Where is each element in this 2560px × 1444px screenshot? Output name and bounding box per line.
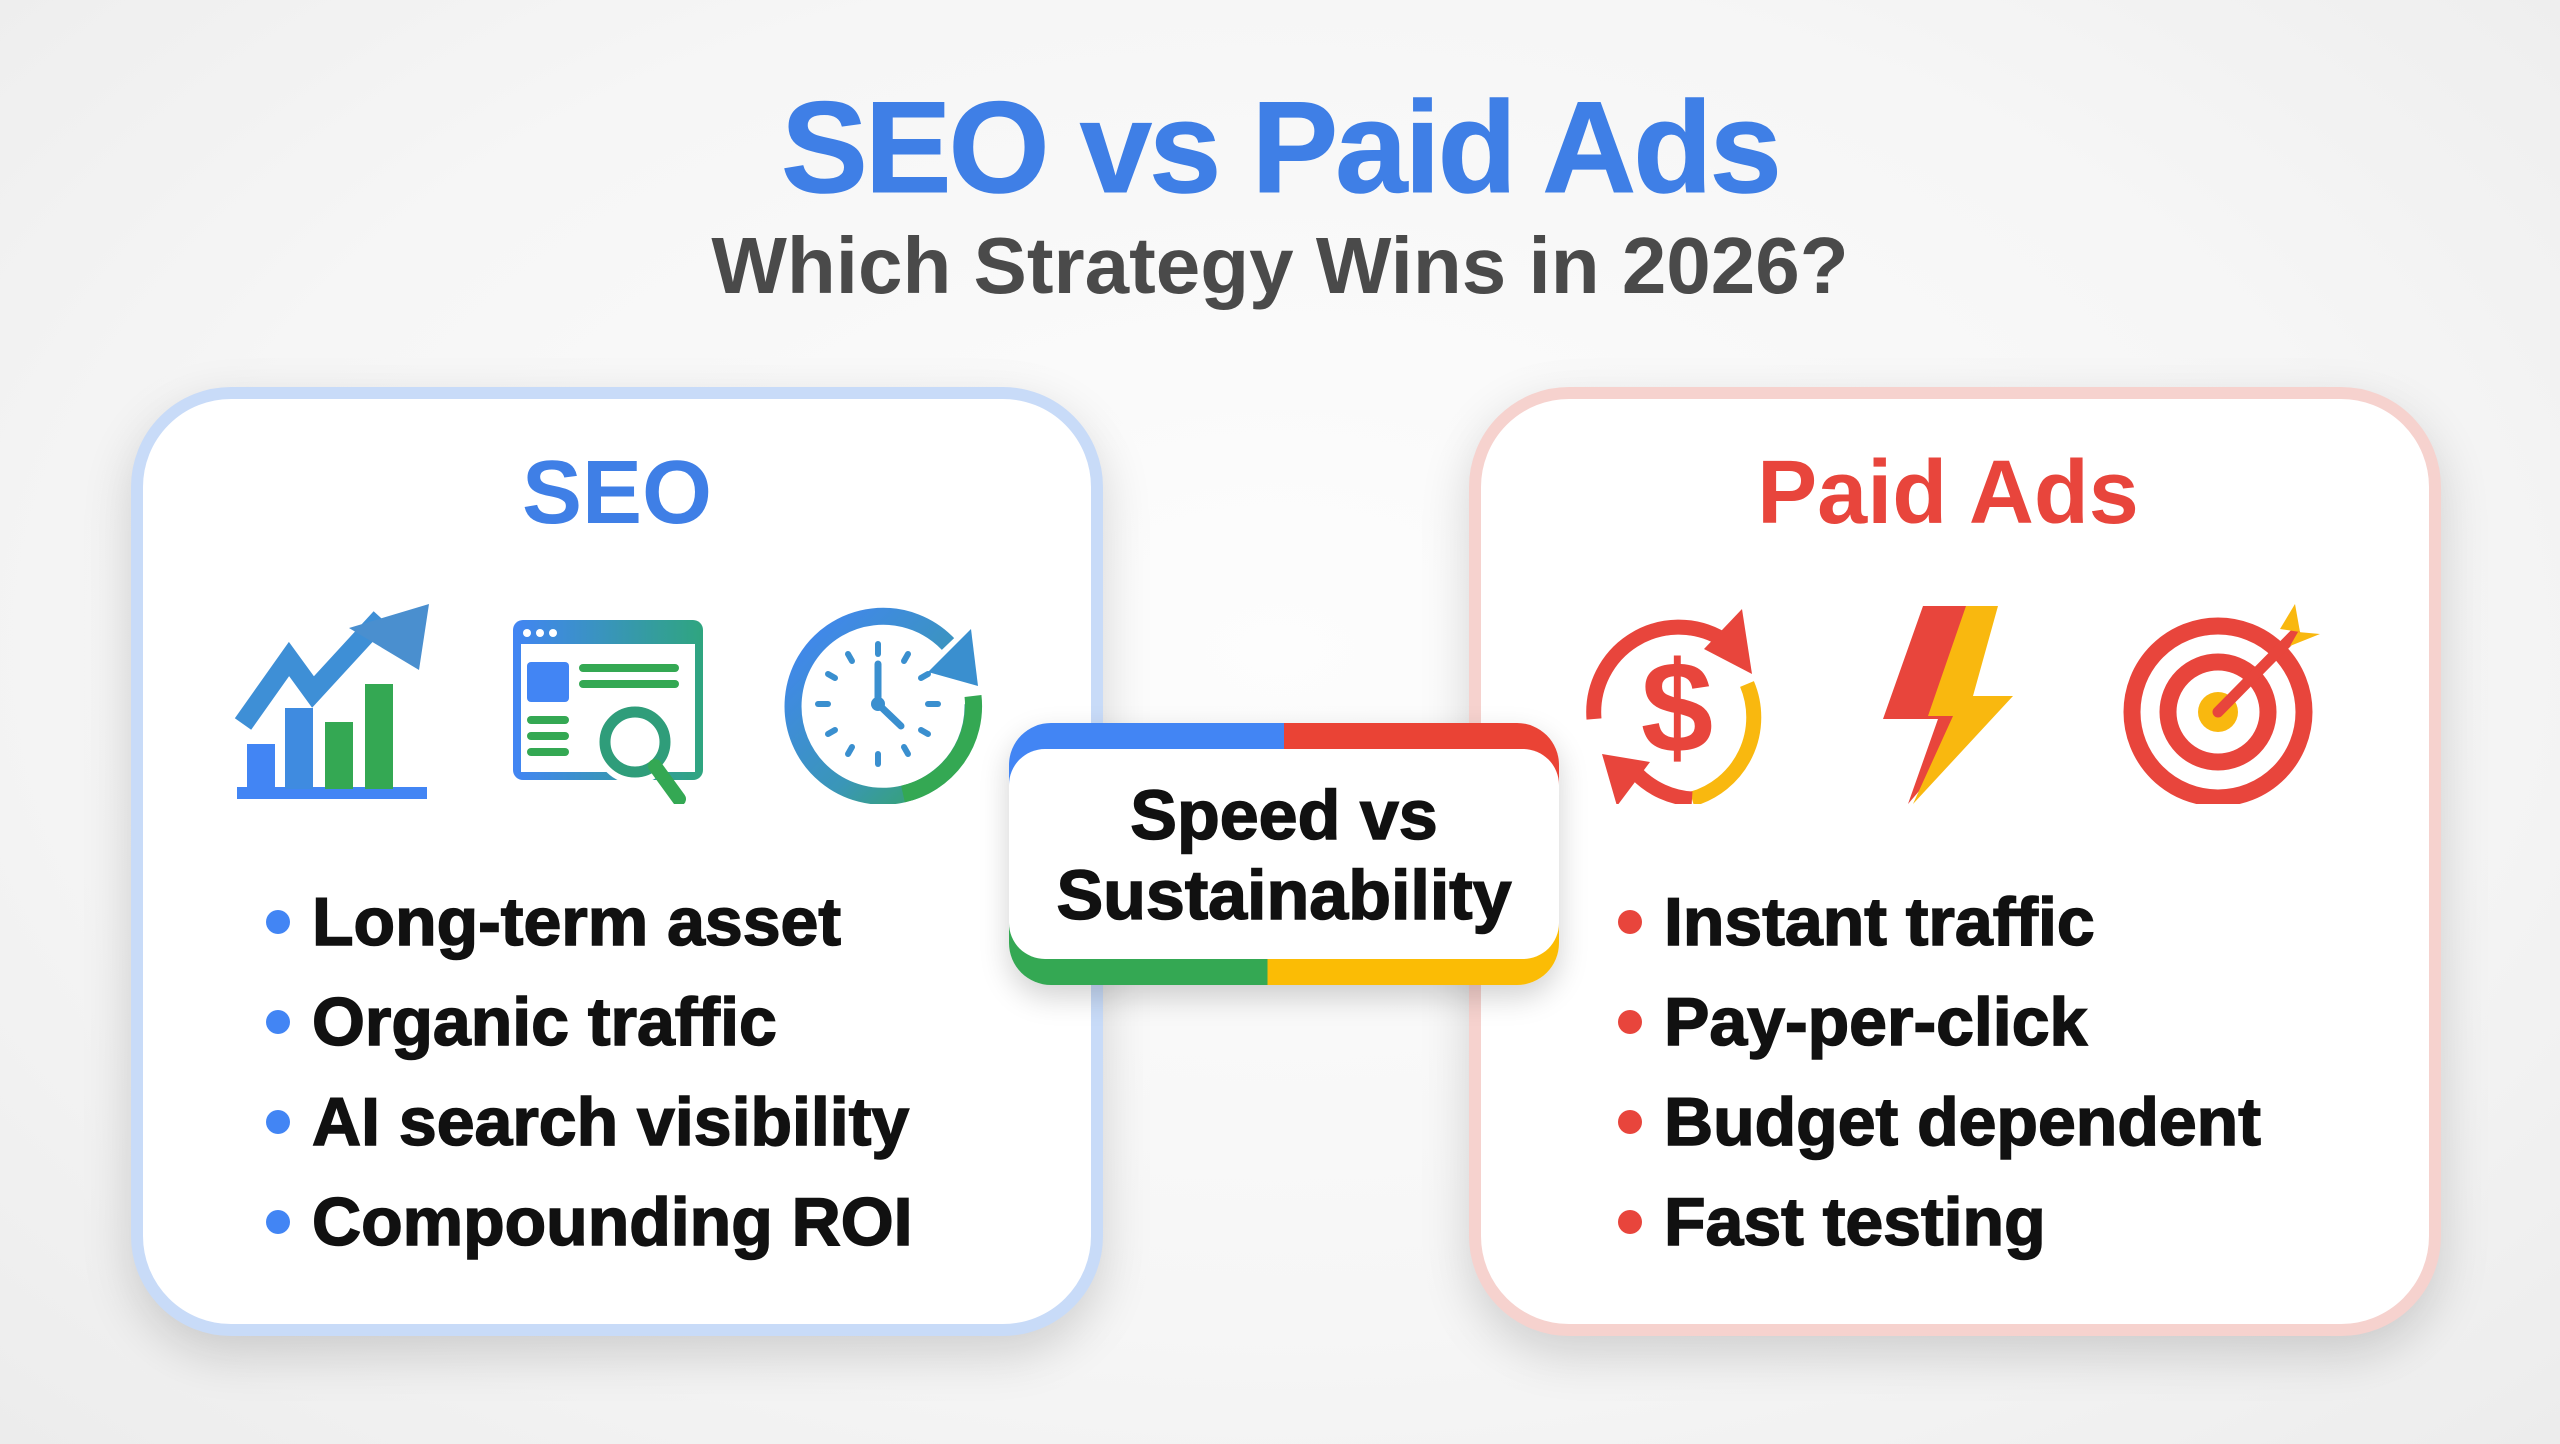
bullet: Compounding ROI <box>312 1184 913 1260</box>
icon: lightning bolt <box>1883 606 2013 804</box>
icon: dollar cycle: $ <box>1641 634 1713 780</box>
bullet: Fast testing <box>1664 1184 2046 1260</box>
icon: target <box>2124 604 2320 804</box>
title: SEO vs Paid Ads <box>781 74 1779 220</box>
subtitle: Which Strategy Wins in 2026? <box>711 221 1849 310</box>
icon: web page search <box>513 620 703 804</box>
panel: Paid Ads <box>1469 387 2441 1336</box>
bullet: Pay-per-click <box>1664 984 2087 1060</box>
list: Paid Ads traits <box>1618 884 2261 1260</box>
callout: Speed vs Sustainability <box>1009 723 1559 985</box>
list: SEO benefits <box>266 884 913 1260</box>
icon: clock <box>784 608 982 804</box>
callout: Speed vs Sustainability: Sustainability <box>1056 856 1512 934</box>
callout: Speed vs Sustainability: Speed vs <box>1130 776 1438 854</box>
heading: Paid Ads: Paid Ads <box>1757 443 2139 543</box>
icon: growth chart <box>234 604 429 799</box>
panel: SEO <box>131 387 1103 1336</box>
bullet: AI search visibility <box>312 1084 909 1160</box>
bullet: Instant traffic <box>1664 884 2095 960</box>
bullet: Budget dependent <box>1664 1084 2261 1160</box>
bullet: Long-term asset <box>312 884 841 960</box>
icon: dollar cycle <box>1586 609 1762 804</box>
heading: SEO: SEO <box>522 443 712 543</box>
bullet: Organic traffic <box>312 984 777 1060</box>
